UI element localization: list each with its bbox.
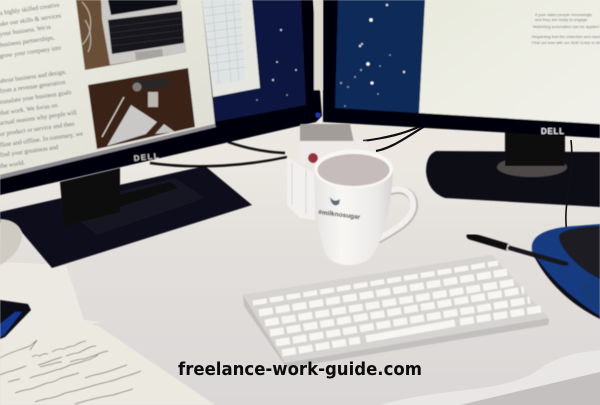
monitor bezel: right [323,0,600,138]
pen [470,236,566,264]
mug handle [378,189,414,240]
logo: right monitor: DELL [541,127,564,136]
card holder [287,124,368,220]
keys [253,263,541,353]
screen: web page: ake our skills & services [0,12,62,28]
screen: web page: from a revenue generation [0,79,67,95]
mouse pad and mouse [531,224,600,319]
screen: web page: a highly skilled creative [0,2,60,17]
right cables [363,124,425,151]
smartphone [0,300,31,339]
screen: web page: grow your company into [0,44,62,60]
screen: web page: that work. We focus on [0,102,59,117]
mug rim [314,150,393,188]
starfield wallpaper [335,0,425,113]
left cables [150,142,287,166]
screen: web page: actual reasons why people will [0,109,77,127]
power light [316,112,320,118]
screen: web page [0,0,216,179]
monitor stand: right [426,130,600,207]
logo: left monitor: DELL [133,151,159,163]
monitor stand: left [0,166,252,268]
screen: web page: business partnerships, [0,34,55,49]
screen: web page: about business and design. [0,69,67,85]
screen: web page: find your greatness and [0,144,59,159]
wireless keyboard [243,255,549,368]
handwritten notes [0,322,215,405]
laptop photo [76,0,186,70]
starfield wallpaper [200,0,306,122]
watermark caption: freelance-work-guide.com [178,359,422,380]
screen: web page: ur product or service and then [0,120,76,138]
screen: document page: and they are ready to engage. [535,17,588,22]
left monitor [0,0,323,268]
monitor cable [566,140,572,232]
notebook and camera photo [88,68,195,149]
mug text: #milknosugar [318,209,361,221]
screen: web page: fline and offline. In summary, we [0,130,84,149]
screen: document page [419,0,600,124]
screen: web page: translate your business goals [0,89,72,106]
right monitor [323,0,600,207]
coffee mug [314,150,414,265]
monitor bezel: left [0,0,322,195]
mug body [314,170,393,265]
screen: web page: your business. We're [0,24,52,38]
twitter bird [330,197,340,205]
screen: web page: the world. [0,159,26,170]
cloth object at left edge [0,219,22,265]
screen: document page: If your sales people increasingly [535,12,592,17]
spreadsheet window [202,0,260,97]
